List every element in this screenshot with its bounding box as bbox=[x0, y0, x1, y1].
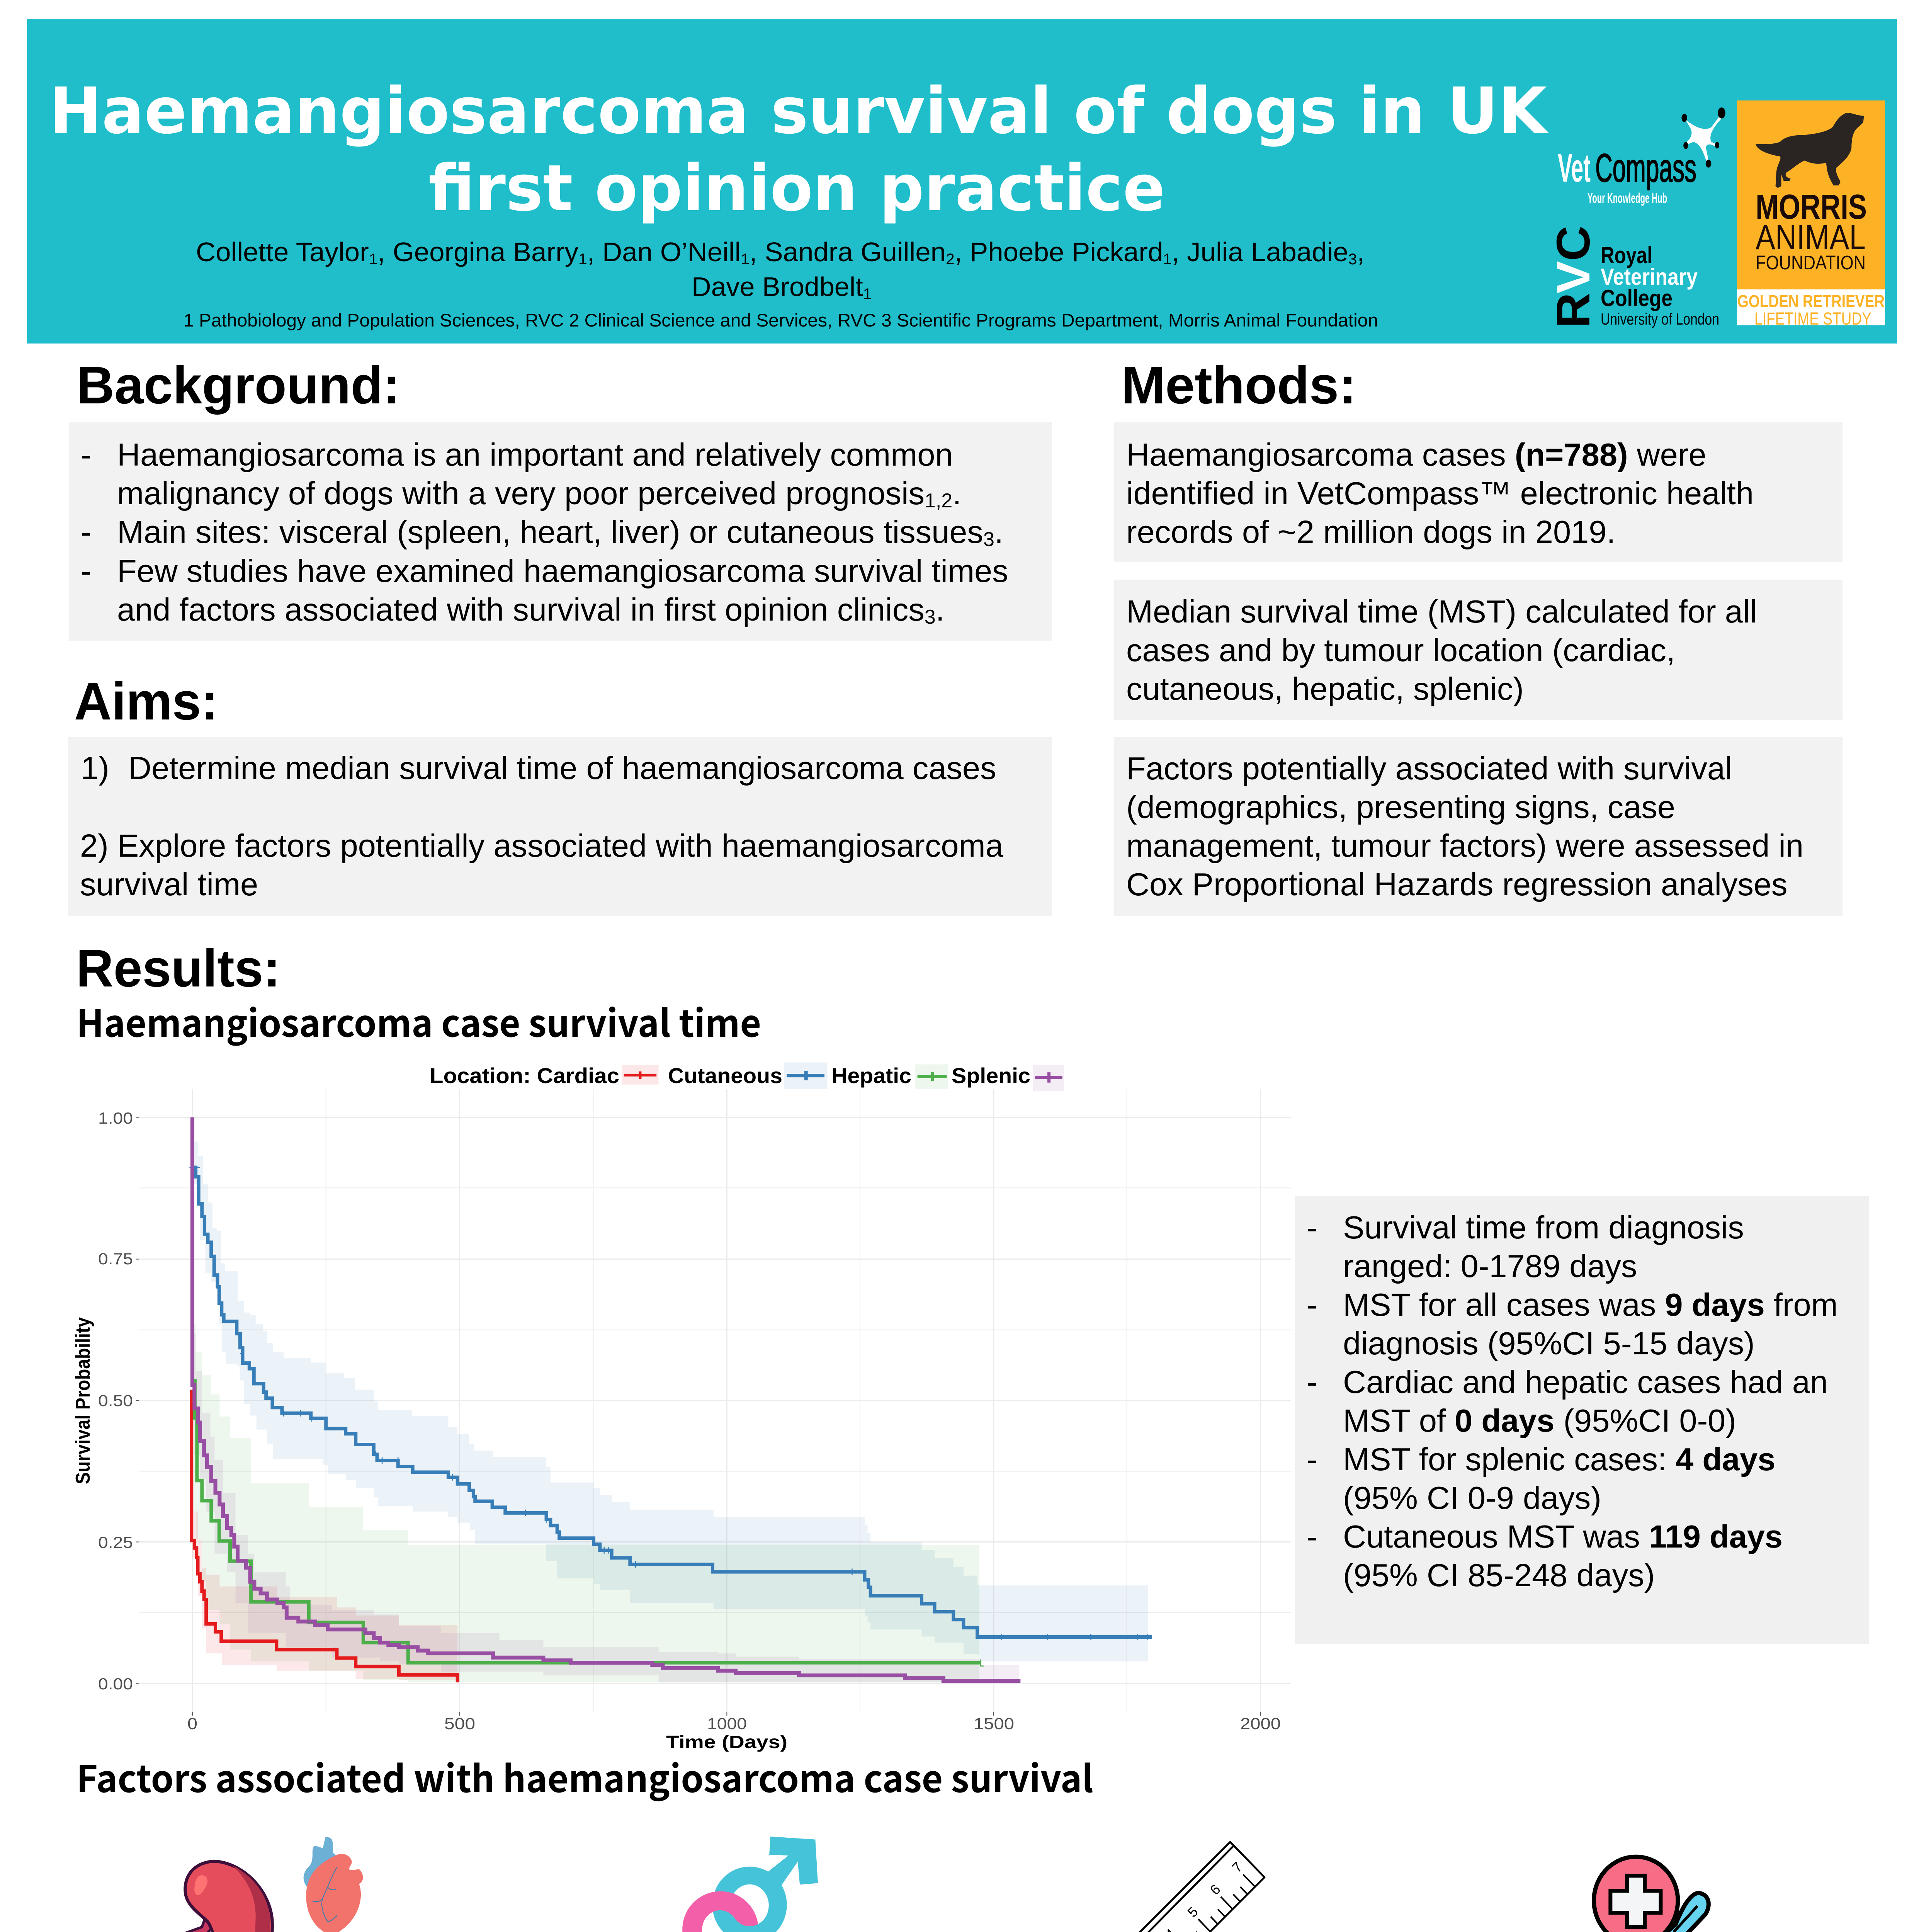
ruler numbers: 5 bbox=[1185, 1904, 1201, 1920]
authors: 2 bbox=[946, 251, 955, 268]
heading: Aims: Aims: bbox=[74, 672, 218, 731]
authors: , bbox=[1357, 237, 1365, 267]
authors bbox=[196, 237, 1365, 303]
x axis labels: Time (Days) bbox=[666, 1732, 787, 1752]
panel: results summary: ranged: 0-1789 days bbox=[1343, 1248, 1637, 1284]
heading: Methods: Methods: bbox=[1121, 356, 1356, 415]
logo: Royal Veterinary College bbox=[1547, 226, 1719, 328]
panel: background: . bbox=[994, 514, 1003, 550]
authors: 1 bbox=[369, 251, 377, 268]
authors: 3 bbox=[1348, 251, 1357, 268]
logo: Royal Veterinary College: Veterinary bbox=[1601, 264, 1698, 290]
panel: methods data source: records of ~2 million dogs in 2019. bbox=[1126, 514, 1615, 550]
authors: 1 bbox=[1163, 251, 1172, 268]
x axis labels: 1000 bbox=[707, 1714, 747, 1733]
panel: background: Few studies have examined haemangiosarcoma survival times bbox=[117, 553, 1008, 589]
panel: aims bbox=[68, 737, 1052, 916]
panel: aims: 1) bbox=[81, 750, 109, 786]
panel: results summary: - bbox=[1307, 1519, 1317, 1554]
y axis labels: 0.75 bbox=[98, 1250, 133, 1268]
icon: male and female symbols bbox=[682, 1837, 818, 1932]
panel: background: malignancy of dogs with a very poor perceived prognosis bbox=[117, 475, 925, 511]
logo: VetCompass: Vet bbox=[1558, 146, 1591, 190]
factor: surgery bbox=[1396, 1857, 1856, 1932]
chart legend labels: Cutaneous bbox=[668, 1063, 782, 1088]
chart legend labels: Location: Cardiac bbox=[430, 1063, 619, 1088]
panel: methods regression bbox=[1114, 737, 1843, 916]
curve: cutaneous-labelled red bbox=[192, 1390, 457, 1682]
y axis labels bbox=[72, 1109, 133, 1693]
logo: Morris Animal Foundation bbox=[1737, 100, 1885, 328]
panel: methods survival time bbox=[1114, 580, 1843, 720]
panel: results summary: - bbox=[1307, 1209, 1317, 1245]
panel: background: - bbox=[81, 514, 92, 550]
title: Haemangiosarcoma survival of dogs in UK bbox=[49, 74, 1549, 148]
panel: results summary: - bbox=[1307, 1441, 1317, 1477]
logo: Royal Veterinary College: RVC bbox=[1547, 226, 1599, 328]
authors: 1 bbox=[863, 286, 872, 303]
authors: , Dan O’Neill bbox=[587, 237, 741, 267]
affiliations: 1 Pathobiology and Population Sciences, RVC 2 Clinical Science and Services, RVC 3 Scientific Programs Department, Morris Animal Foundation bbox=[184, 310, 1378, 330]
panel: background: . bbox=[952, 475, 961, 511]
subheading: factors: Factors associated with haemangiosarcoma case survival bbox=[76, 1749, 1093, 1803]
x axis labels bbox=[187, 1714, 1281, 1752]
panel: aims: Determine median survival time of haemangiosarcoma cases bbox=[128, 750, 996, 786]
factor: size bbox=[967, 1842, 1371, 1932]
logo: Royal Veterinary College: University of London bbox=[1601, 310, 1719, 328]
panel: results summary: (95% CI 85-248 days) bbox=[1343, 1557, 1655, 1593]
panel: methods regression: Factors potentially associated with survival bbox=[1126, 750, 1732, 786]
panel: results summary: Survival time from diagnosis bbox=[1343, 1209, 1744, 1245]
x axis labels: 1500 bbox=[974, 1714, 1014, 1733]
authors: Dave Brodbelt bbox=[692, 272, 863, 302]
y axis labels: 0.25 bbox=[98, 1533, 133, 1551]
y axis labels: 1.00 bbox=[98, 1109, 133, 1127]
panel: background: Main sites: visceral (spleen, heart, liver) or cutaneous tissues bbox=[117, 514, 983, 550]
icon: scalpel and medical cross bbox=[1564, 1857, 1708, 1932]
panel: background: - bbox=[81, 437, 92, 473]
panel: background: 3 bbox=[983, 528, 994, 551]
panel: results summary: (95% CI 0-9 days) bbox=[1343, 1480, 1601, 1516]
panel: background: Haemangiosarcoma is an important and relatively common bbox=[117, 437, 953, 473]
curve: green bbox=[192, 1380, 981, 1663]
panel: results summary bbox=[1295, 1196, 1869, 1644]
chart legend labels bbox=[430, 1063, 1030, 1088]
subheading: survival time: Haemangiosarcoma case survival time bbox=[76, 994, 761, 1048]
panel: results summary: MST of 0 days (95%CI 0-0) bbox=[1343, 1403, 1736, 1439]
curve: purple bbox=[192, 1117, 1020, 1681]
logo: VetCompass: Your Knowledge Hub bbox=[1588, 190, 1667, 206]
authors: , Julia Labadie bbox=[1172, 237, 1348, 267]
header banner bbox=[27, 19, 1897, 344]
panel: methods survival time: Median survival time (MST) calculated for all bbox=[1126, 594, 1757, 629]
authors: , Phoebe Pickard bbox=[955, 237, 1163, 267]
title bbox=[49, 74, 1549, 225]
authors: , Georgina Barry bbox=[377, 237, 578, 267]
panel: background: . bbox=[936, 592, 945, 628]
authors: 1 bbox=[578, 251, 587, 268]
authors: 1 bbox=[741, 251, 750, 268]
panel: methods survival time: cutaneous, hepatic, splenic) bbox=[1126, 671, 1524, 707]
x axis labels: 2000 bbox=[1240, 1714, 1281, 1733]
panel: results summary: Cutaneous MST was 119 days bbox=[1343, 1519, 1783, 1554]
panel: methods regression: (demographics, presenting signs, case bbox=[1126, 789, 1675, 825]
title: first opinion practice bbox=[428, 151, 1165, 225]
icon: spleen, heart and skin bbox=[175, 1837, 398, 1932]
panel: background: - bbox=[81, 553, 92, 589]
logo: Morris Animal Foundation: MORRIS bbox=[1756, 188, 1867, 226]
panel: aims: survival time bbox=[80, 866, 258, 902]
factor: location bbox=[61, 1837, 516, 1932]
confidence band: splenic-hepatic-cutaneous ribbons bbox=[192, 1141, 1148, 1682]
chart legend labels: Splenic bbox=[952, 1063, 1030, 1088]
logo: Royal Veterinary College: Royal bbox=[1601, 242, 1652, 268]
heading: Results: Results: bbox=[76, 939, 280, 998]
y axis labels: 0.50 bbox=[98, 1391, 133, 1410]
panel: background: 3 bbox=[925, 606, 936, 628]
icon: golden retriever silhouette bbox=[1756, 113, 1864, 188]
logo: Morris Animal Foundation: LIFETIME STUDY bbox=[1754, 309, 1871, 328]
chart: Kaplan-Meier survival curves bbox=[72, 1063, 1291, 1752]
factor: sex bbox=[682, 1837, 818, 1932]
logo: Morris Animal Foundation: ANIMAL bbox=[1756, 218, 1866, 257]
panel: methods data source bbox=[1114, 422, 1843, 562]
panel: methods data source: identified in VetCompass™ electronic health bbox=[1126, 475, 1754, 511]
chart gridlines bbox=[136, 1089, 1291, 1716]
panel: methods regression: Cox Proportional Hazards regression analyses bbox=[1126, 866, 1788, 902]
panel: methods data source: Haemangiosarcoma cases (n=788) were bbox=[1126, 437, 1707, 473]
x axis labels: 500 bbox=[444, 1714, 475, 1733]
chart legend keys bbox=[622, 1063, 1064, 1091]
panel: results summary: - bbox=[1307, 1287, 1317, 1323]
y axis labels: Survival Probability bbox=[72, 1317, 94, 1484]
panel: results summary: Cardiac and hepatic cases had an bbox=[1343, 1364, 1828, 1400]
ruler numbers: 6 bbox=[1207, 1881, 1224, 1898]
panel: background: and factors associated with survival in first opinion clinics bbox=[117, 592, 925, 628]
panel: results summary: diagnosis (95%CI 5-15 days) bbox=[1343, 1325, 1755, 1361]
ruler numbers bbox=[1095, 1859, 1246, 1932]
chart legend labels: Hepatic bbox=[831, 1063, 911, 1088]
heading: Background: Background: bbox=[76, 356, 400, 415]
panel: methods survival time: cases and by tumour location (cardiac, bbox=[1126, 632, 1675, 668]
authors: , Sandra Guillen bbox=[750, 237, 946, 267]
y axis labels: 0.00 bbox=[98, 1675, 133, 1693]
logo: VetCompass: Compass bbox=[1595, 146, 1696, 190]
authors: Collette Taylor bbox=[196, 237, 367, 267]
panel: background: 1,2 bbox=[925, 490, 952, 512]
panel: methods regression: management, tumour factors) were assessed in bbox=[1126, 828, 1803, 864]
panel: results summary: MST for all cases was 9 days from bbox=[1343, 1287, 1838, 1323]
ruler numbers: 7 bbox=[1229, 1859, 1246, 1876]
panel: aims: 2) Explore factors potentially associated with haemangiosarcoma bbox=[80, 828, 1004, 864]
logo: Morris Animal Foundation: GOLDEN RETRIEVER bbox=[1737, 291, 1885, 311]
panel: results summary: MST for splenic cases: 4 days bbox=[1343, 1441, 1775, 1477]
logo: VetCompass bbox=[1558, 107, 1725, 206]
x axis labels: 0 bbox=[187, 1714, 197, 1733]
icon: ruler bbox=[1079, 1842, 1265, 1932]
panel: background bbox=[69, 422, 1052, 641]
panel: results summary: - bbox=[1307, 1364, 1317, 1400]
logo: Royal Veterinary College: College bbox=[1601, 285, 1673, 311]
logo: Morris Animal Foundation: FOUNDATION bbox=[1756, 252, 1866, 274]
curve: blue bbox=[189, 1117, 1152, 1640]
